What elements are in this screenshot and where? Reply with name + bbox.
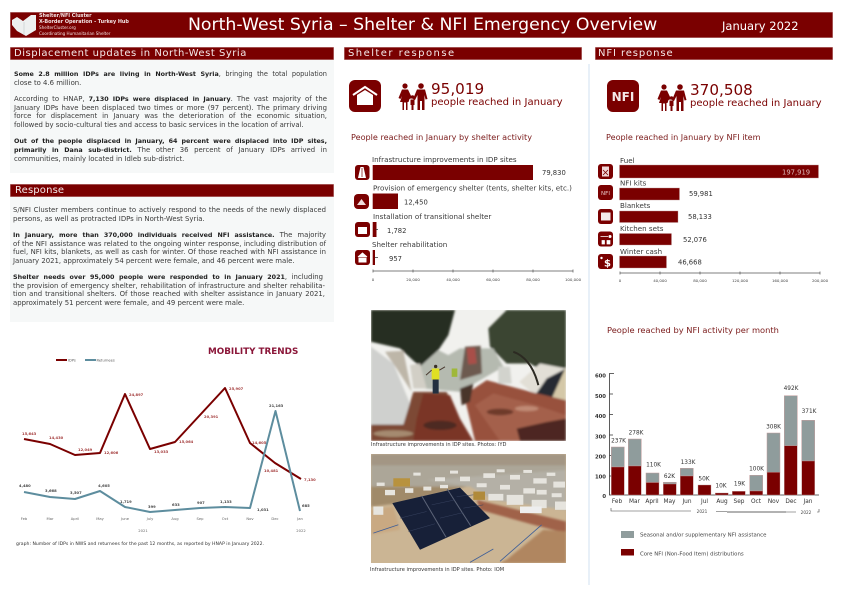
IDP data labels: 14,430 [49, 436, 64, 440]
y axis [595, 374, 819, 500]
IDP data labels: 24,897 [129, 393, 144, 397]
IDP data labels: 12,606 [104, 451, 119, 455]
columns: core NFI distributions [611, 446, 815, 495]
IDP data labels: 15,064 [179, 440, 194, 444]
column totals: 19K [734, 482, 745, 488]
month labels: Mar [47, 517, 54, 521]
column totals [611, 386, 817, 490]
heading: displacement updates: Displacement updates in North-West Syria [14, 48, 247, 59]
month labels: Dec [271, 517, 279, 521]
icon: shelter house [349, 80, 381, 112]
paragraph: shelter needs: tion and transitional shelters. Of those reached with shelter assistance in January 2021, [13, 290, 325, 298]
month labels: Dec [785, 499, 797, 505]
icon: fuel [598, 164, 613, 179]
legend: core NFI [621, 549, 744, 558]
bar labels [620, 156, 664, 256]
y axis: 200 [595, 454, 606, 460]
returnee data labels: 399 [148, 505, 156, 509]
cluster name text: ShelterCluster.org [39, 25, 76, 30]
photo: trench works in IDP site [371, 310, 566, 441]
paragraph: displaced in January: January IDPs have been displaced two times or more (97 percent). The primary driving [14, 104, 327, 112]
column totals: 371K [802, 409, 817, 415]
month labels: Jun [681, 499, 692, 505]
icon: blankets [598, 209, 613, 224]
stat: people reached by NFI: people reached in January [690, 98, 822, 109]
month labels: April [71, 517, 79, 521]
icon: NFI badge [607, 80, 639, 112]
month labels: Sep [197, 517, 204, 521]
month labels: 2021 [138, 529, 148, 533]
month labels: Jan [803, 499, 813, 505]
chart legend: IDPs [68, 358, 76, 362]
icon: NFI kits [598, 185, 613, 200]
column totals: 278K [629, 430, 644, 436]
axis [372, 270, 582, 282]
heading: displacement updates [10, 47, 334, 60]
icon: transitional shelter [355, 222, 370, 237]
returnee data labels: 907 [197, 501, 205, 505]
month labels: Sep [734, 499, 745, 505]
cluster name text: X-Border Operation - Turkey Hub [39, 19, 129, 25]
title: North-West Syria – Shelter & NFI Emergency Overview [188, 15, 657, 35]
bar values: 12,450 [404, 198, 428, 206]
bar labels: Shelter rehabilitation [372, 240, 447, 249]
paragraph: IDPs living in North-West Syria [14, 70, 327, 87]
year brackets [611, 508, 819, 515]
cluster name text [39, 13, 129, 36]
paragraph: destination of displaced people: Out of the people displaced in January, 64 percent were displaced into IDP sites, [14, 138, 327, 145]
bar values: 52,076 [683, 236, 707, 244]
returnee data labels: 4,605 [98, 484, 110, 488]
panel: response text [10, 197, 334, 322]
chart: shelter activity bars [354, 155, 582, 282]
stat: people reached by shelter [431, 80, 563, 108]
column totals: 62K [664, 474, 675, 480]
paragraph: displaced in January: force for displacement in January was the deterioration of the economic situation, [14, 112, 327, 120]
IDP data labels: 7,130 [304, 478, 316, 482]
icon: winter cash: $ [604, 258, 611, 270]
stat: people reached by NFI: 370,508 [690, 81, 753, 99]
column totals: 237K [611, 438, 626, 444]
returnee data labels: 685 [302, 504, 310, 508]
year brackets: 2022 [801, 510, 812, 515]
line: IDPs [24, 388, 301, 479]
paragraph: shelter needs: the provision of emergency shelter, rehabilitation of infrastructure and shelter rehabilita- [13, 282, 325, 290]
icon: NFI badge: NFI [612, 90, 634, 104]
bar labels: Installation of transitional shelter [373, 212, 491, 221]
columns: seasonal or supplementary assistance [611, 396, 815, 491]
chart title: MOBILITY TRENDS [208, 347, 298, 357]
bar values [387, 169, 566, 263]
legend: seasonal assistance: Seasonal and/or supplementary NFI assistance [640, 532, 767, 538]
month labels: Jul [700, 499, 708, 505]
heading: response: Response [15, 185, 64, 196]
paragraph: shelter needs: Shelter needs over 95,000 people were responded to in January 2021, including [13, 273, 323, 281]
chart legend [56, 358, 115, 362]
stat: people reached by NFI [690, 81, 822, 109]
bar values: 79,830 [542, 169, 566, 177]
axis: 20,000 [406, 277, 420, 282]
heading: shelter response [344, 47, 582, 60]
paragraph: NFI assistance [12, 231, 326, 265]
heading: response [10, 184, 334, 197]
paragraph: NFI assistance: January 2021, approximately 54 percent were female, and 46 percent were male. [13, 257, 295, 265]
heading: NFI response [595, 47, 833, 60]
paragraph: NFI assistance: of the NFI assistance was related to the ongoing winter response, including distribution of [13, 240, 326, 248]
bar labels: Winter cash [620, 247, 662, 256]
returnee data labels: 1,719 [120, 500, 132, 504]
bar labels: NFI kits [620, 178, 647, 188]
icon: emergency tent [354, 194, 369, 209]
paragraph: NFI assistance: fuel, NFI kits, blankets, as well as cash for winter. Of those reached with NFI assistance in [13, 248, 326, 256]
caption: photo 1: Infrastructure improvements in IDP sites. Photos: IYD [371, 442, 506, 448]
axis: 60,000 [486, 277, 500, 282]
month labels: Nov [246, 517, 254, 521]
caption: photo 2: Infrastructure improvements in IDP sites. Photo: IOM [370, 567, 504, 573]
y axis: 300 [595, 434, 606, 440]
month labels: April [645, 499, 659, 505]
paragraph: destination of displaced people [14, 138, 327, 163]
month labels [612, 499, 813, 505]
y axis: 100 [595, 474, 606, 480]
y axis: 600 [595, 374, 606, 380]
month labels: Feb [612, 499, 622, 505]
year brackets: 2021 [697, 509, 708, 514]
bars [373, 165, 533, 265]
IDP data labels: 12,049 [78, 448, 93, 452]
paragraph: cluster members: persons, as well as protracted IDPs in North-West Syria. [13, 215, 205, 223]
month labels: Oct [751, 499, 762, 505]
month labels: June [120, 517, 130, 521]
icon: winter cash [598, 254, 613, 270]
paragraph: shelter needs [13, 273, 325, 307]
bar labels: Provision of emergency shelter (tents, shelter kits, etc.) [373, 184, 572, 192]
date: January 2022 [722, 19, 799, 33]
IDP data labels: 20,391 [204, 415, 219, 419]
chart: NFI item bars [598, 156, 829, 283]
chart caption: graph: Number of IDPs in NWS and returnees for the past 12 months, as reported by HNAP in January 2022. [16, 541, 264, 547]
month labels: Aug [716, 499, 728, 505]
legend: seasonal assistance [621, 531, 767, 538]
header banner [10, 12, 833, 38]
IDP data labels: 14,605 [252, 441, 267, 445]
y axis: 500 [595, 394, 606, 400]
axis: 40,000 [653, 278, 667, 283]
icon: NFI kits: NFI [601, 191, 610, 197]
chart: mobility trends line chart [16, 347, 316, 547]
returnee data labels: 1,133 [220, 500, 232, 504]
icon: rehabilitation [355, 250, 370, 265]
returnee data labels: 633 [172, 503, 180, 507]
bar values: 197,919 [782, 168, 810, 176]
icon: Shelter Cluster logo [12, 15, 36, 36]
photo: solar panels in IDP site [371, 454, 566, 563]
paragraph: displaced in January [14, 95, 327, 128]
axis: 120,000 [732, 278, 749, 283]
month labels: Nov [768, 499, 780, 505]
subheading: NFI activity per month: People reached by NFI activity per month [607, 325, 779, 335]
heading: shelter response: Shelter response [348, 48, 456, 59]
axis: 40,000 [446, 277, 460, 282]
panel: displacement text [10, 60, 334, 173]
line: returnees [24, 411, 300, 512]
bar labels: Infrastructure improvements in IDP sites [372, 155, 517, 164]
IDP data labels: 10,481 [264, 469, 279, 473]
axis: 80,000 [526, 277, 540, 282]
icon: family shelter [398, 83, 428, 110]
IDP data labels: 25,907 [229, 387, 244, 391]
chart: NFI activity per month stacked columns [595, 373, 820, 558]
month labels: Feb [21, 517, 28, 521]
month labels: Jan [296, 517, 304, 521]
returnee data labels [19, 404, 310, 512]
heading: NFI response: NFI response [598, 48, 674, 59]
chart legend: Returnees [96, 358, 115, 362]
paragraph: cluster members: S/NFI Cluster members continue to actively respond to the needs of the newly displaced [13, 206, 326, 214]
month labels: 2022 [296, 529, 306, 533]
returnee data labels: 3,507 [70, 491, 82, 495]
returnee data labels: 3,668 [45, 489, 57, 493]
axis: 0 [372, 277, 375, 282]
stat: people reached by shelter: people reached in January [431, 97, 563, 108]
column totals: 100K [749, 466, 764, 472]
stat: people reached by shelter: 95,019 [431, 80, 484, 98]
bar values [678, 168, 810, 266]
paragraph: IDPs living in North-West Syria: close to 4.6 million. [14, 79, 81, 87]
cluster name text: Coordinating Humanitarian Shelter [39, 31, 110, 36]
icon: family NFI [658, 84, 686, 111]
paragraph: displaced in January: followed by socio-cultural ties and access to basic services in the location of arrival. [14, 120, 304, 128]
paragraph: destination of displaced people: communities, mainly located in Idleb sub-district. [14, 155, 184, 163]
axis: 100,000 [565, 277, 582, 282]
month labels: Mar [629, 499, 641, 505]
column totals: 10K [715, 484, 727, 490]
month labels: Oct [222, 517, 229, 521]
axis: 160,000 [772, 278, 789, 283]
month labels [21, 517, 306, 533]
bar labels: Kitchen sets [620, 224, 664, 233]
subheading: NFI item: People reached in January by NFI item [606, 132, 760, 142]
axis: 0 [619, 278, 622, 283]
bar labels [372, 155, 572, 249]
subheading: shelter activity: People reached in January by shelter activity [351, 132, 532, 142]
bar labels: Fuel [620, 156, 635, 165]
IDP data labels: 13,033 [154, 450, 169, 454]
paragraph: cluster members [13, 206, 326, 223]
bar values: 957 [389, 255, 402, 263]
month labels: May [664, 499, 676, 505]
bar values: 58,133 [688, 213, 712, 221]
column totals: 308K [766, 424, 781, 430]
column totals: 133K [681, 460, 696, 466]
paragraph: destination of displaced people: primarily in Dana sub-district. The other 36 percent of January IDPs arrived in [14, 146, 327, 154]
column totals: 110K [646, 462, 661, 468]
paragraph: shelter needs: approximately 51 percent were female, and 49 percent were male. [13, 299, 244, 307]
axis: 80,000 [693, 278, 707, 283]
paragraph: NFI assistance: In January, more than 370,000 individuals received NFI assistance. The majority [13, 231, 326, 239]
month labels: July [146, 517, 154, 521]
bars [620, 165, 818, 268]
returnee data labels: 1,031 [257, 508, 269, 512]
returnee data labels: 4,480 [19, 484, 31, 488]
returnee data labels: 21,163 [269, 404, 284, 408]
column totals: 492K [784, 386, 799, 392]
IDP data labels: 15,643 [22, 432, 37, 436]
icon: road [355, 165, 370, 180]
paragraph: displaced in January: According to HNAP, 7,130 IDPs were displaced in January. The vast majority of the [14, 95, 327, 103]
legend: core NFI: Core NFI (Non-Food Item) distributions [640, 552, 744, 558]
y axis: 400 [595, 414, 606, 420]
y axis: 0 [602, 494, 606, 500]
bar values: 46,668 [678, 258, 702, 266]
IDP data labels [22, 387, 316, 482]
bar values: 1,782 [387, 227, 406, 235]
column totals: 50K [698, 476, 710, 482]
paragraph: IDPs living in North-West Syria: Some 2.8 million IDPs are living in North-West Syria, bringing the total population [14, 70, 327, 78]
axis [619, 272, 829, 283]
bar labels: Blankets [620, 201, 651, 210]
month labels: Aug [171, 517, 179, 521]
icon: kitchen sets [598, 232, 613, 246]
month labels: May [96, 517, 105, 521]
axis: 200,000 [812, 278, 829, 283]
bar values: 59,981 [689, 190, 713, 198]
cluster name text: Shelter/NFI Cluster [39, 13, 92, 19]
